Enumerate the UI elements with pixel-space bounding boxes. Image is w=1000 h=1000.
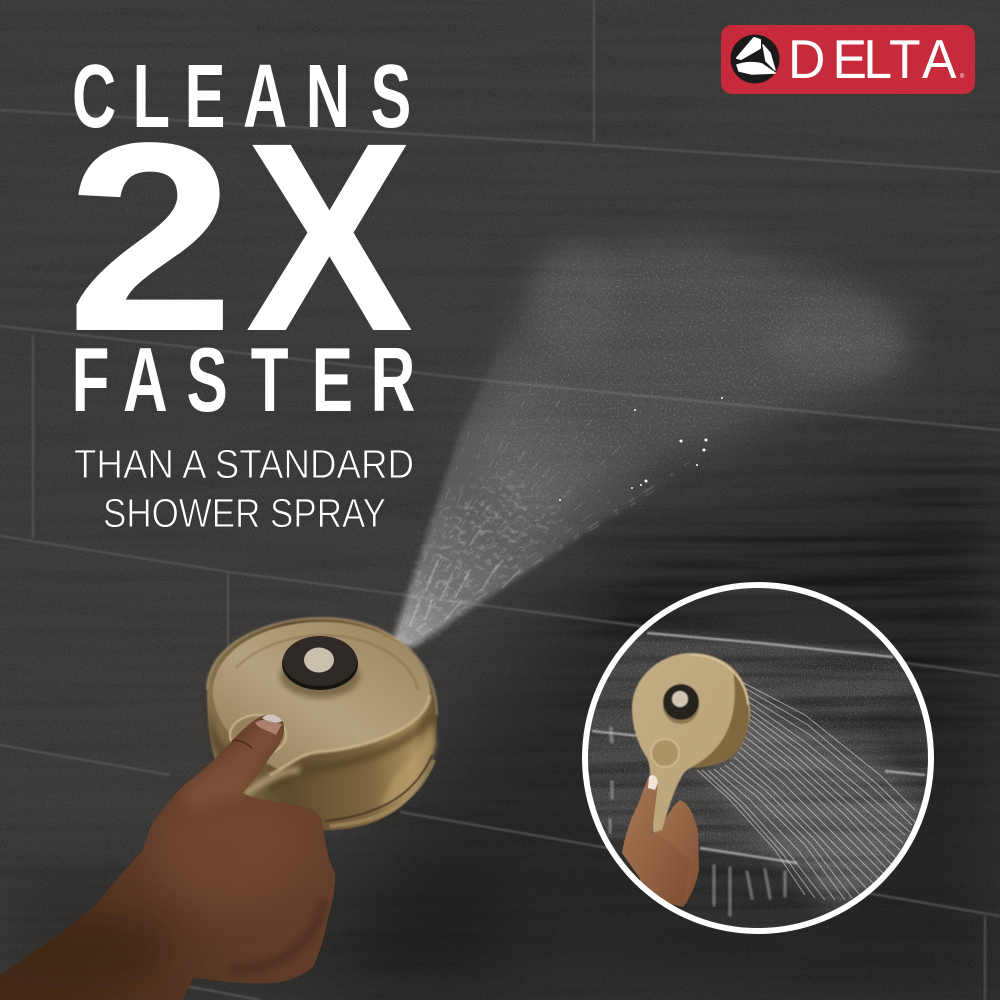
shower head body [207, 618, 437, 830]
headline: cleans 2X faster: 2 [66, 86, 235, 387]
Delta logo: DELTA [788, 30, 957, 90]
inset spray mist [700, 690, 925, 915]
small shower head [632, 653, 750, 833]
headline: cleans 2X faster: CLEANS [72, 46, 411, 147]
subheading: SHOWER SPRAY [103, 490, 386, 536]
headline: cleans 2X faster [66, 46, 415, 431]
subheading: THAN A STANDARD [74, 441, 414, 487]
hand [0, 700, 340, 1000]
Delta logo [721, 25, 975, 94]
watery texture near the nozzle [395, 474, 566, 645]
shower head center button [280, 636, 360, 698]
water jets [697, 682, 915, 900]
headline: cleans 2X faster: FASTER [72, 330, 415, 431]
headline: cleans 2X faster: X [245, 88, 415, 388]
bright droplets [559, 397, 723, 501]
small hand [640, 800, 699, 907]
subheading [74, 441, 414, 536]
Delta logo: ® [960, 73, 965, 80]
hand shower head with thumb [0, 618, 437, 1000]
spray streaks [396, 390, 700, 645]
logo emblem [730, 34, 780, 84]
small thumb and wrist [622, 775, 683, 907]
water spray mist [391, 228, 923, 650]
inset circle: full spray view [585, 585, 931, 931]
